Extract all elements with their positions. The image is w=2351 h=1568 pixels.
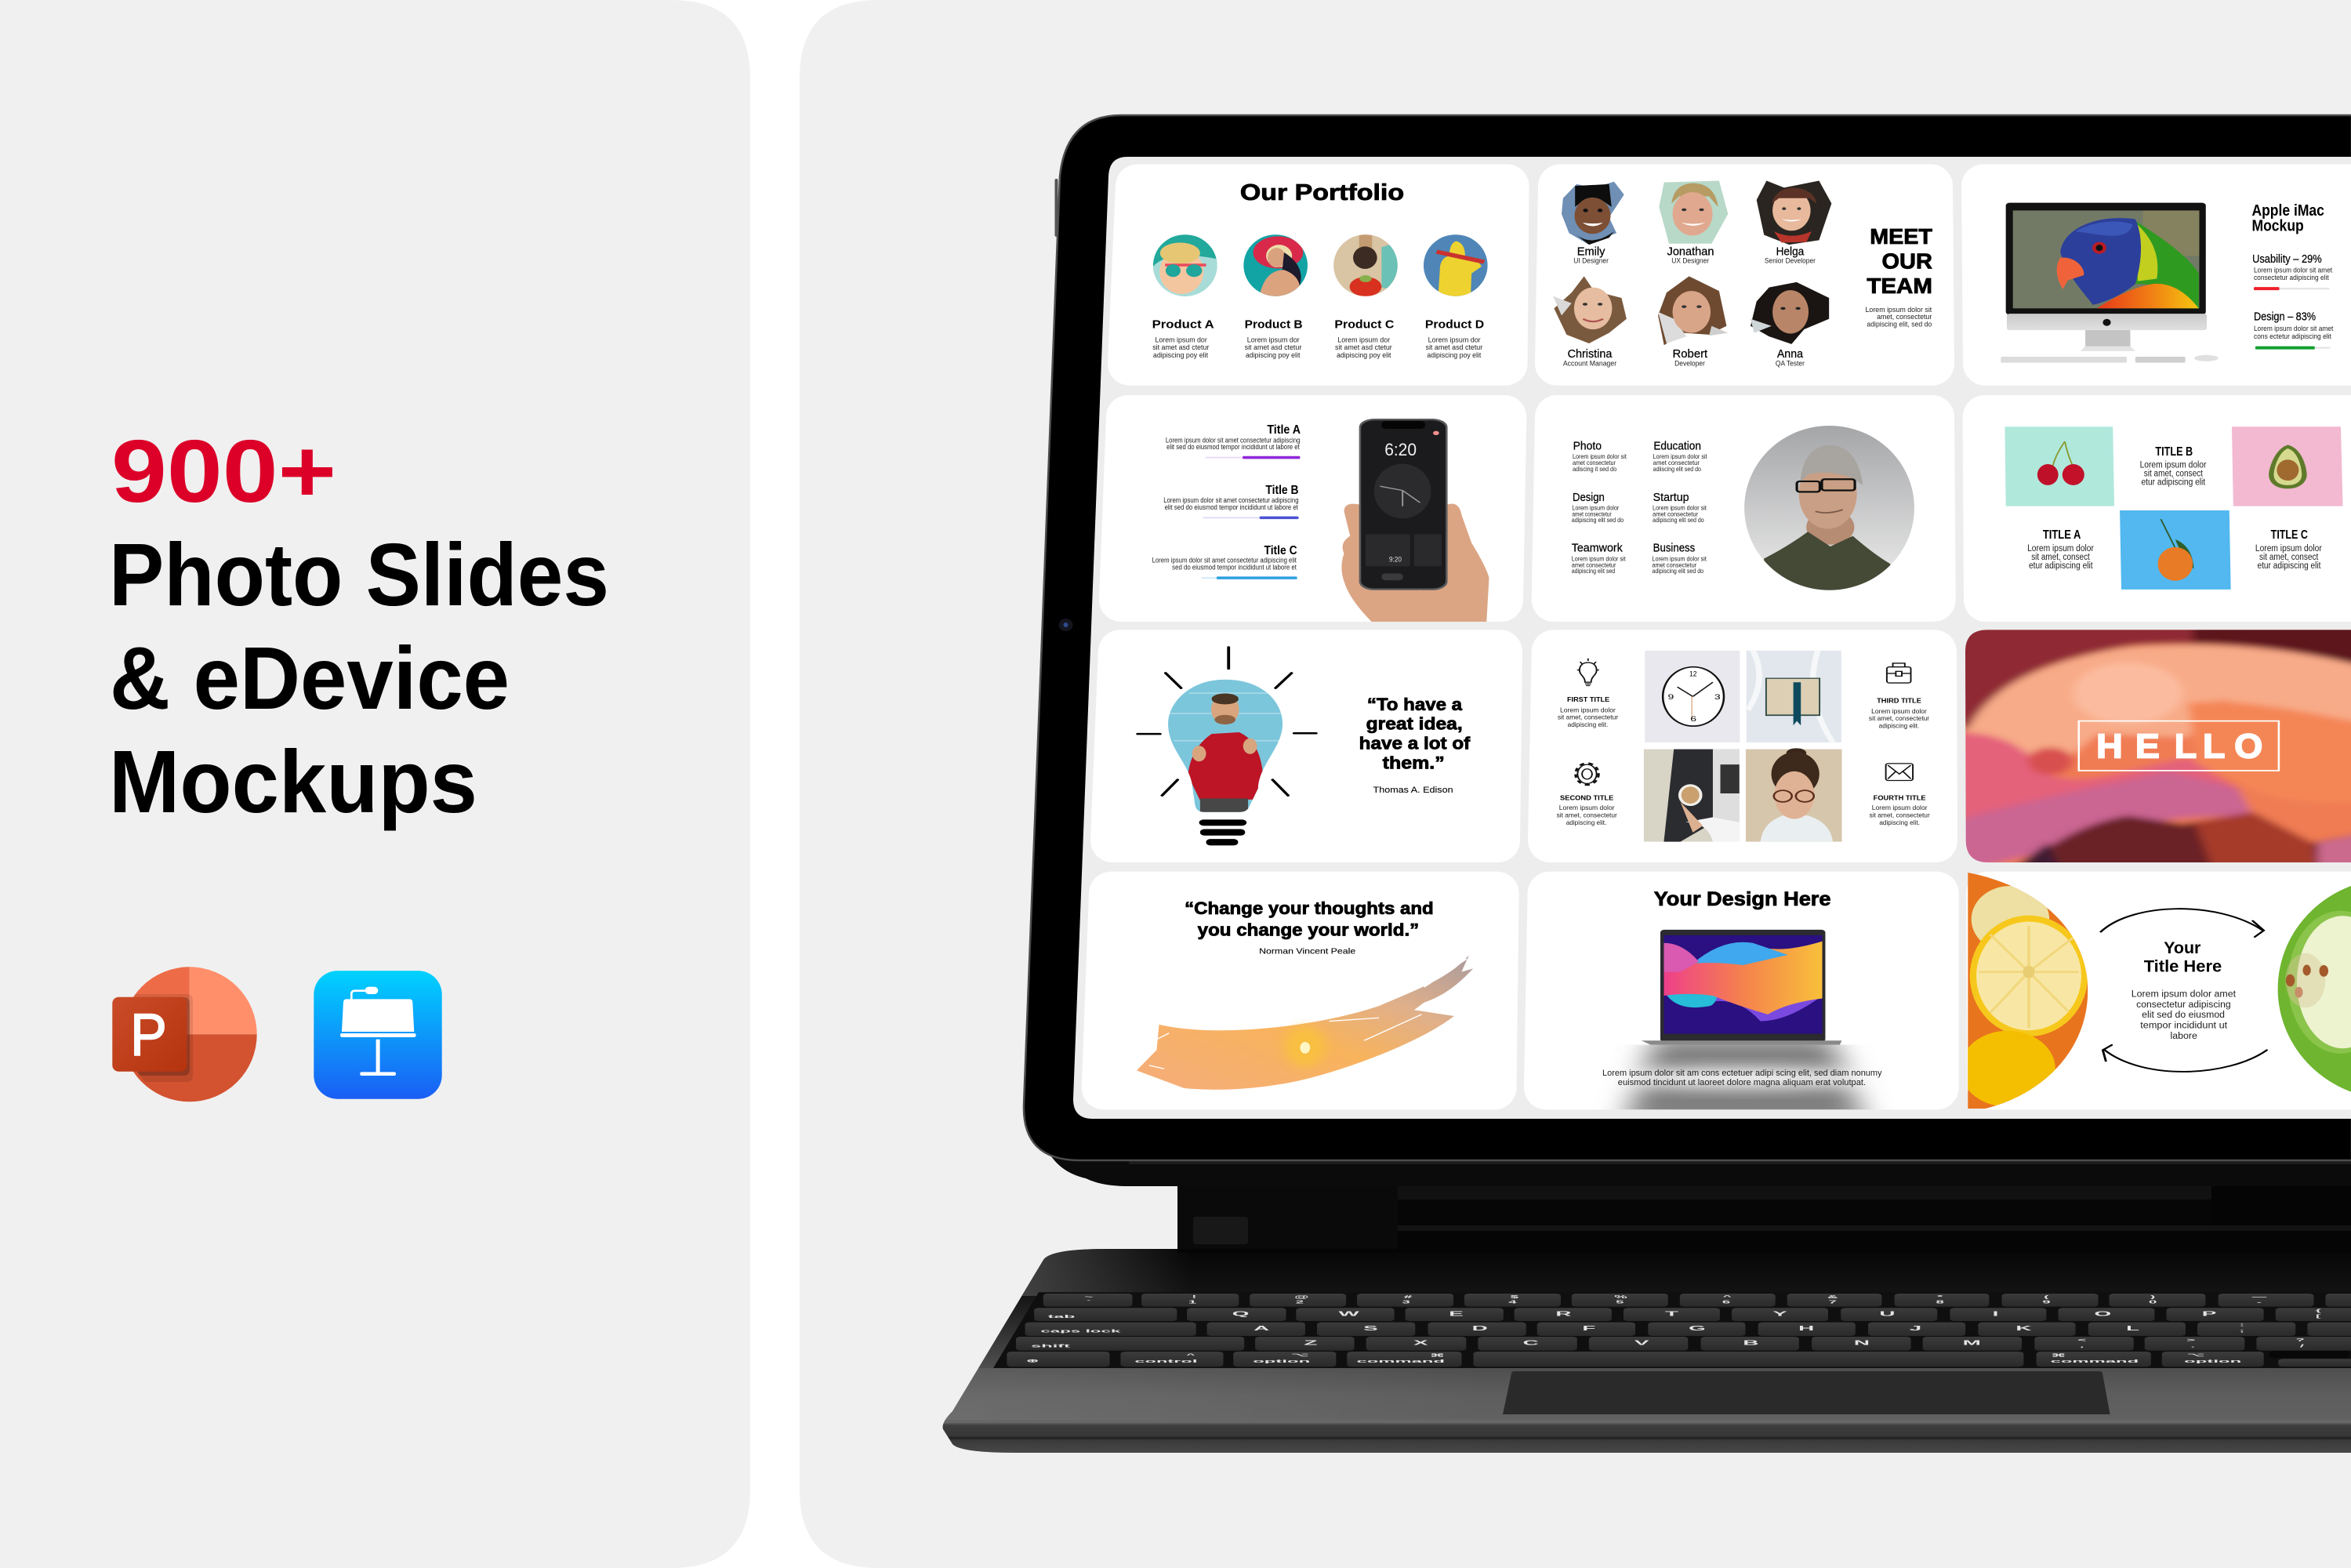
text block: Title A: sit amet, consect	[2031, 552, 2090, 562]
topic: Business: adipiscing elit sed do	[1652, 568, 1703, 575]
photo: Product A baby with sunglasses	[1152, 234, 1217, 296]
quote: Edison	[1359, 695, 1471, 795]
text block: First title: sit amet, consectetur	[1558, 714, 1618, 721]
stat: Design 83%: Design – 83%	[2254, 310, 2316, 323]
text block: Title A: elit sed do eiusmod tempor incididunt ut labore et	[1166, 444, 1300, 451]
text block: Title A: Lorem ipsum dolor sit amet consectetur adipiscing	[1166, 437, 1300, 445]
keys: 7	[1829, 1300, 1837, 1304]
device: hinge and stand	[1047, 1149, 2351, 1253]
slide cards	[1104, 187, 2351, 1087]
text block: First title: FIRST TITLE	[1567, 696, 1609, 703]
topic: Teamwork: amet consectetur	[1572, 562, 1616, 569]
product descriptions: Lorem ipsum dor	[1247, 336, 1300, 344]
lightbulb rays	[1137, 648, 1316, 796]
keys: @	[1294, 1294, 1308, 1299]
heading line: Mockups: Mockups	[109, 732, 477, 831]
keys: tab	[1048, 1314, 1075, 1319]
screen content: lower right slides	[1602, 651, 2351, 1128]
key labels: R	[1555, 1310, 1572, 1317]
topic: Business: Lorem ipsum dolor sit	[1652, 556, 1707, 563]
keys: —	[2252, 1294, 2267, 1299]
topic: Education: adiiscing elit sed do	[1653, 466, 1701, 473]
laptop mockup	[1642, 930, 1841, 1044]
keys: >	[2186, 1338, 2195, 1342]
caption text: euismod tincidunt ut laoreet dolore magna aliquam erat volutpat.	[1618, 1078, 1866, 1087]
keys: 5	[1616, 1300, 1624, 1304]
team names row 2: Anna	[1777, 347, 1803, 360]
slide: icon feature labels left	[1557, 659, 1618, 826]
text block: Title B	[1163, 483, 1299, 519]
quote: Edison: great idea,	[1366, 714, 1463, 734]
tablet screen background	[1073, 157, 2351, 1119]
slide: sunset brush quote	[1137, 898, 1473, 1090]
text block: Your Title Here	[2132, 938, 2236, 1041]
text block: Meet our team: OUR	[1882, 249, 1932, 274]
text block: Second title: adipiscing elit.	[1566, 820, 1606, 826]
team names row 2: Robert	[1673, 347, 1707, 360]
text block: Second title: SECOND TITLE	[1560, 795, 1613, 802]
key labels: D	[1472, 1325, 1488, 1332]
heading line: and eDevice: & eDevice	[110, 629, 510, 728]
product descriptions: Lorem ipsum dor	[1428, 336, 1481, 344]
product descriptions: sit amet asd ctetur	[1335, 344, 1392, 352]
keys: ⌥	[1291, 1352, 1308, 1357]
topic: Photo: amet consectetur	[1573, 459, 1616, 466]
photo: happy man inside bulb	[1166, 678, 1286, 814]
photo: orange	[2120, 510, 2231, 590]
keys: {	[2316, 1308, 2322, 1312]
keys: ^	[1723, 1294, 1732, 1299]
portrait: Christina	[1553, 276, 1627, 343]
keys: 8	[1936, 1300, 1944, 1304]
icon: briefcase outline	[1887, 663, 1911, 683]
keys: *	[1937, 1294, 1943, 1299]
quote: Edison: have a lot of	[1359, 734, 1471, 753]
slide: fruits with Your Title Here	[1961, 872, 2351, 1109]
text block: Third title: Lorem ipsum dolor	[1871, 709, 1927, 715]
team names row 1	[1573, 245, 1816, 265]
product labels: Product B	[1245, 318, 1303, 331]
topic: Photo: Lorem ipsum dolor sit	[1573, 453, 1627, 460]
keys: 9	[2042, 1300, 2051, 1304]
slide: Meet our team portraits and names	[1553, 180, 1831, 368]
text block: Fourth title: adipiscing elit.	[1879, 820, 1920, 826]
text block: Third title: sit amet, consectetur	[1869, 716, 1930, 723]
product descriptions: adipiscing poy elit	[1246, 352, 1301, 359]
text block: Apple iMac Mockup: Mockup	[2251, 217, 2304, 234]
slide: topic grid labels	[1572, 439, 1707, 575]
text block: Title A: etur adipiscing elit	[2029, 561, 2093, 571]
arrow: bottom curved	[2102, 1045, 2267, 1072]
key labels	[1232, 1310, 2216, 1347]
keys: ?	[2295, 1338, 2305, 1342]
icon: tablet camera	[1058, 619, 1072, 631]
keys: ;	[2240, 1328, 2244, 1333]
keys: 0	[2149, 1300, 2157, 1304]
screen content: upper left slides	[1149, 180, 1831, 622]
keys: 4	[1508, 1300, 1517, 1304]
text block: Title B: sit amet, consect	[2144, 469, 2203, 479]
hand holding phone	[1341, 504, 1489, 622]
photo: wall clock: 3	[1714, 692, 1721, 701]
iMac computer	[2001, 203, 2219, 363]
text block: Title B: Lorem ipsum dolor	[2140, 460, 2207, 470]
text block: Your Title Here: labore	[2171, 1032, 2197, 1041]
keys: 3	[1402, 1300, 1410, 1304]
keys: $	[1511, 1294, 1518, 1299]
text block: Title C: sed do eiusmod tempor incididunt ut labore et	[1172, 564, 1297, 572]
key labels: V	[1634, 1340, 1649, 1347]
keys: ~	[1084, 1294, 1093, 1299]
text block: Your Title Here: tempor incididunt ut	[2140, 1021, 2227, 1031]
photo: wall clock: 9	[1668, 692, 1674, 701]
keys: `	[1087, 1299, 1091, 1304]
portrait: Emily	[1562, 182, 1624, 245]
text block: Second title: Lorem ipsum dolor	[1559, 805, 1615, 812]
text block: Your Title Here: elit sed do eiusmod	[2142, 1011, 2225, 1020]
keys: option	[1253, 1359, 1310, 1363]
text block: First title: adipiscing elit.	[1568, 722, 1608, 728]
text block: Second title: sit amet, consectetur	[1557, 812, 1617, 819]
text block: Apple iMac Mockup	[2251, 202, 2324, 234]
text block: Meet our team: TEAM	[1867, 274, 1932, 299]
topic: Startup: Startup	[1653, 491, 1689, 503]
screen content: lower left slides	[1137, 648, 1618, 1090]
trackpad	[1503, 1371, 2110, 1414]
keys: &	[1827, 1294, 1838, 1299]
quote: Edison: them.”	[1383, 753, 1445, 773]
phone mockup	[1359, 419, 1448, 590]
keys: <	[2077, 1338, 2086, 1342]
topic: Photo	[1573, 439, 1627, 473]
keys: ^	[1186, 1353, 1195, 1358]
product labels: Product C	[1334, 318, 1394, 331]
quote: Edison: Thomas A. Edison	[1373, 786, 1453, 795]
slide: Title A B C with phone	[1152, 419, 1489, 622]
key labels: N	[1854, 1340, 1870, 1347]
panel: right background	[800, 0, 2351, 1568]
icon: Keynote	[314, 971, 442, 1099]
device: keyboard base	[941, 1249, 2351, 1453]
icon: envelope outline	[1886, 764, 1913, 781]
canyon rock layers	[1965, 630, 2351, 862]
keys: 1	[1188, 1300, 1197, 1304]
heading: 900+ Photo Slides and eDevice Mockups	[109, 422, 609, 831]
team names row 2: Developer	[1674, 360, 1705, 368]
text block: Title B: elit sed do eiusmod tempor incididunt ut labore et	[1165, 504, 1298, 512]
key labels: H	[1798, 1325, 1814, 1332]
slide: Your Design Here laptop	[1602, 887, 1882, 1128]
text block: Title C: TITLE C	[2271, 528, 2308, 542]
product descriptions: adipiscing poy elit	[1337, 352, 1391, 359]
key labels: T	[1665, 1310, 1679, 1317]
topic: Startup: adipiscing elit sed do	[1653, 517, 1704, 524]
keys: command	[1356, 1359, 1445, 1363]
keys: caps lock	[1040, 1329, 1121, 1334]
keys: control	[1134, 1359, 1197, 1363]
key labels: O	[2095, 1310, 2111, 1317]
photo: citrus fruits	[1961, 872, 2090, 1109]
keys: shift	[1031, 1344, 1071, 1348]
topic: Design	[1572, 491, 1624, 524]
text block: Title B: etur adipiscing elit	[2142, 477, 2205, 488]
caption text: Lorem ipsum dolor sit am cons ectetuer adipi scing elit, sed diam nonumy	[1602, 1068, 1882, 1078]
topic: Teamwork	[1572, 542, 1626, 575]
keys: ,	[2080, 1344, 2084, 1348]
topic: Education: Education	[1653, 439, 1701, 452]
screen content: upper right slides	[1743, 202, 2343, 592]
arrow: top curved	[2101, 909, 2264, 937]
photo: woman with glasses	[1746, 748, 1841, 842]
keys: ⌘	[1430, 1353, 1444, 1358]
keys: !	[1192, 1294, 1196, 1299]
photo: man with glasses portrait	[1743, 424, 1917, 592]
text block: Title A: Title A	[1267, 423, 1301, 437]
topic: Business: Business	[1653, 542, 1695, 554]
text block: Title B: Title B	[1265, 483, 1299, 497]
photo: Product C woman from above	[1333, 234, 1398, 296]
team names row 2: Christina	[1568, 347, 1613, 360]
photo: Product B woman with hat	[1243, 234, 1308, 296]
key labels: U	[1879, 1310, 1895, 1317]
stat: Design 83%	[2254, 310, 2333, 350]
topic: Business: amet consectetur	[1652, 562, 1697, 569]
text block: Title B: TITLE B	[2155, 445, 2193, 459]
keys: )	[2150, 1294, 2155, 1299]
product descriptions: sit amet asd ctetur	[1245, 344, 1301, 352]
key labels: I	[1993, 1310, 1998, 1317]
icon: tablet side button	[1055, 179, 1058, 237]
keys: ⊕	[1026, 1359, 1039, 1363]
key labels: J	[1910, 1325, 1921, 1332]
photo: cherries	[2005, 426, 2114, 506]
quote: Norman Vincent Peale	[1185, 898, 1434, 956]
key labels: F	[1582, 1325, 1595, 1332]
text block: Fourth title	[1870, 795, 1930, 826]
quote: Norman Vincent Peale: you change your world.”	[1198, 920, 1419, 940]
phone mockup: 9:20	[1389, 556, 1402, 564]
portrait: Anna	[1751, 282, 1829, 344]
text block: Second title	[1557, 795, 1617, 826]
topic: Teamwork: adipiscing elit sed	[1572, 568, 1615, 575]
text block: Third title	[1869, 697, 1930, 730]
photo: coffee and laptop	[1644, 750, 1740, 842]
bulb base	[1199, 819, 1246, 845]
icon: PowerPoint: P	[130, 1002, 167, 1069]
key labels: C	[1523, 1340, 1539, 1347]
slide: lightbulb quote	[1137, 648, 1471, 845]
text block: First title: Lorem ipsum dolor	[1560, 707, 1616, 714]
stat: Usability 29%	[2252, 252, 2332, 290]
key labels: X	[1413, 1340, 1428, 1347]
text block: Title A: Lorem ipsum dolor	[2027, 543, 2094, 554]
text block: Fourth title: sit amet, consectetur	[1870, 812, 1930, 819]
text block: Title A	[1166, 423, 1301, 459]
keyboard side lighting	[945, 1249, 1168, 1420]
key labels: G	[1689, 1325, 1706, 1332]
topic: Education	[1653, 439, 1707, 473]
product descriptions: adipiscing poy elit	[1153, 352, 1209, 359]
topic: Startup: Lorem ipsum dolor sit	[1653, 505, 1707, 512]
laptop shadow	[1608, 1044, 1881, 1110]
key labels: L	[2126, 1325, 2139, 1332]
photo: wall clock: 6	[1690, 714, 1696, 723]
product descriptions: Lorem ipsum dor	[1337, 336, 1390, 344]
text block: Title C	[2255, 528, 2322, 571]
team names row 2: Account Manager	[1563, 360, 1616, 368]
keys: ⌘	[2051, 1353, 2066, 1358]
text block: Your Title Here: consectetur adipiscing	[2136, 1000, 2231, 1010]
key labels: Y	[1772, 1310, 1787, 1317]
text block: Meet our team: adipiscing elit, sed do	[1867, 321, 1932, 328]
caption text	[1602, 1068, 1882, 1087]
key labels: M	[1963, 1340, 1981, 1347]
keyboard body	[942, 1249, 2351, 1453]
topic: Design: Design	[1573, 491, 1605, 503]
quote: Norman Vincent Peale: Norman Vincent Peale	[1259, 946, 1355, 956]
slide: photo grid	[1644, 651, 1930, 842]
portrait: Robert	[1658, 276, 1728, 345]
text block: Your Title Here: Title Here	[2144, 957, 2222, 975]
keys: 6	[1722, 1300, 1731, 1304]
topic: Photo: Photo	[1573, 439, 1602, 452]
text: HELLO in frame: HELLO	[2096, 727, 2262, 765]
product descriptions	[1152, 336, 1482, 359]
team names row 1: Helga	[1776, 245, 1804, 258]
text block: Title A	[2027, 528, 2094, 571]
icon: PowerPoint	[112, 967, 257, 1102]
text block: Fourth title: Lorem ipsum dolor	[1872, 805, 1928, 812]
brush stroke with sunset	[1137, 955, 1473, 1090]
text block: Title C: Lorem ipsum dolor sit amet consectetur adipiscing elit	[1152, 557, 1297, 564]
keys: #	[1404, 1294, 1413, 1299]
product descriptions: sit amet asd ctetur	[1425, 344, 1482, 352]
text block: Meet our team: amet, consectetur	[1877, 314, 1932, 321]
product descriptions: sit amet asd ctetur	[1152, 344, 1209, 352]
quote: Norman Vincent Peale: “Change your thoughts and	[1185, 898, 1434, 919]
product descriptions: Lorem ipsum dor	[1155, 336, 1207, 344]
text block: Title B: Lorem ipsum dolor sit amet consectetur adipiscing	[1163, 497, 1299, 505]
keys: option	[2184, 1359, 2241, 1363]
photo: open book on sheets	[1747, 651, 1841, 742]
topic: Photo: adiscing it sed do	[1573, 466, 1616, 473]
text block: Title B	[2140, 445, 2207, 488]
key labels: K	[2015, 1325, 2032, 1332]
topic: Teamwork: Lorem ipsum dolor sit	[1572, 556, 1626, 563]
key labels: P	[2202, 1310, 2216, 1317]
topic: Startup	[1653, 491, 1707, 524]
topic: Design: Lorem ipsum dolor	[1572, 505, 1620, 512]
text block: Fourth title: FOURTH TITLE	[1874, 795, 1926, 802]
text block: Your Title Here: Your	[2164, 938, 2200, 957]
photo: green apples	[2278, 886, 2351, 1092]
keys: .	[2191, 1344, 2195, 1348]
team names row 2: QA Tester	[1776, 360, 1805, 368]
phone mockup: 6:20	[1384, 440, 1417, 459]
topic: Startup: amet consectetur	[1653, 511, 1698, 518]
team names row 1: UI Designer	[1573, 257, 1609, 265]
key labels: B	[1743, 1340, 1758, 1347]
key labels: W	[1338, 1310, 1360, 1317]
team names row 1: Senior Developer	[1765, 257, 1816, 265]
topic: Teamwork: Teamwork	[1572, 542, 1623, 554]
key labels: Z	[1304, 1340, 1317, 1347]
text: HELLO in frame	[2079, 721, 2279, 771]
photo: wall clock	[1645, 651, 1740, 742]
text block: Title A: TITLE A	[2043, 528, 2081, 542]
keys: [	[2316, 1314, 2321, 1319]
keys: :	[2240, 1323, 2244, 1327]
text block: Meet our team: MEET	[1870, 224, 1932, 249]
portrait: Helga	[1757, 180, 1831, 245]
topic: Business	[1652, 542, 1707, 575]
keys: ⌥	[2187, 1352, 2204, 1357]
slide: fruit photo grid	[2005, 426, 2343, 590]
slide: Apple iMac mockup	[2001, 202, 2333, 363]
key labels: Q	[1232, 1310, 1249, 1317]
photo: wall clock: 12	[1689, 670, 1697, 678]
team names row 1: Jonathan	[1667, 245, 1714, 258]
slide: Our Portfolio	[1149, 180, 1492, 359]
device: tablet body	[1024, 115, 2351, 1160]
heading line: Photo Slides: Photo Slides	[109, 525, 609, 624]
slide title: Your Design Here	[1654, 887, 1830, 910]
panel: left background	[0, 0, 750, 1568]
topic: Design: amet consectetur	[1572, 511, 1612, 518]
keys	[993, 1292, 2351, 1368]
product labels: Product A	[1152, 318, 1214, 331]
heading line: 900+: 900+	[111, 422, 336, 521]
keys: 2	[1296, 1300, 1304, 1304]
text block: Title C	[1152, 543, 1297, 579]
text block: Third title: THIRD TITLE	[1877, 697, 1921, 705]
keys: (	[2044, 1294, 2049, 1299]
photo: parrot on iMac screen	[2013, 210, 2199, 308]
photo: avocado	[2232, 426, 2343, 506]
team names row 1: Emily	[1577, 245, 1605, 258]
topic: Education: amet consectetur	[1653, 459, 1700, 466]
key labels: S	[1363, 1325, 1378, 1332]
photo slide: canyon with HELLO	[1965, 630, 2351, 862]
quote: Edison: “To have a	[1367, 695, 1462, 714]
icon: gear outline	[1576, 763, 1598, 785]
key labels: A	[1254, 1325, 1270, 1332]
product labels: Product D	[1425, 318, 1484, 331]
topic: Design: adipiscing elit sed do	[1572, 517, 1624, 524]
text block: Your Title Here: Lorem ipsum dolor amet	[2132, 989, 2236, 1000]
text block: Title C: Title C	[1264, 543, 1297, 557]
keys: /	[2300, 1344, 2304, 1348]
key labels: E	[1449, 1310, 1464, 1317]
product descriptions: adipiscing poy elit	[1427, 352, 1482, 359]
slide title: Our Portfolio	[1240, 180, 1404, 205]
team names row 1: UX Designer	[1671, 257, 1709, 265]
team names row 2	[1563, 347, 1805, 368]
keys: %	[1614, 1294, 1627, 1299]
text block: Meet our team	[1865, 224, 1932, 328]
topic: Education: Lorem ipsum dolor sit	[1653, 453, 1707, 460]
text block: Third title: adipiscing elit.	[1879, 723, 1919, 730]
portrait: Jonathan	[1659, 180, 1728, 244]
text block: First title	[1558, 696, 1618, 728]
keys: -	[2257, 1300, 2262, 1304]
product labels	[1152, 318, 1484, 331]
icon: lightbulb outline	[1577, 659, 1599, 686]
photo: Product D yellow hoodie	[1424, 234, 1488, 296]
text block: Meet our team: Lorem ipsum dolor sit	[1865, 307, 1932, 314]
keys: command	[2051, 1359, 2139, 1363]
